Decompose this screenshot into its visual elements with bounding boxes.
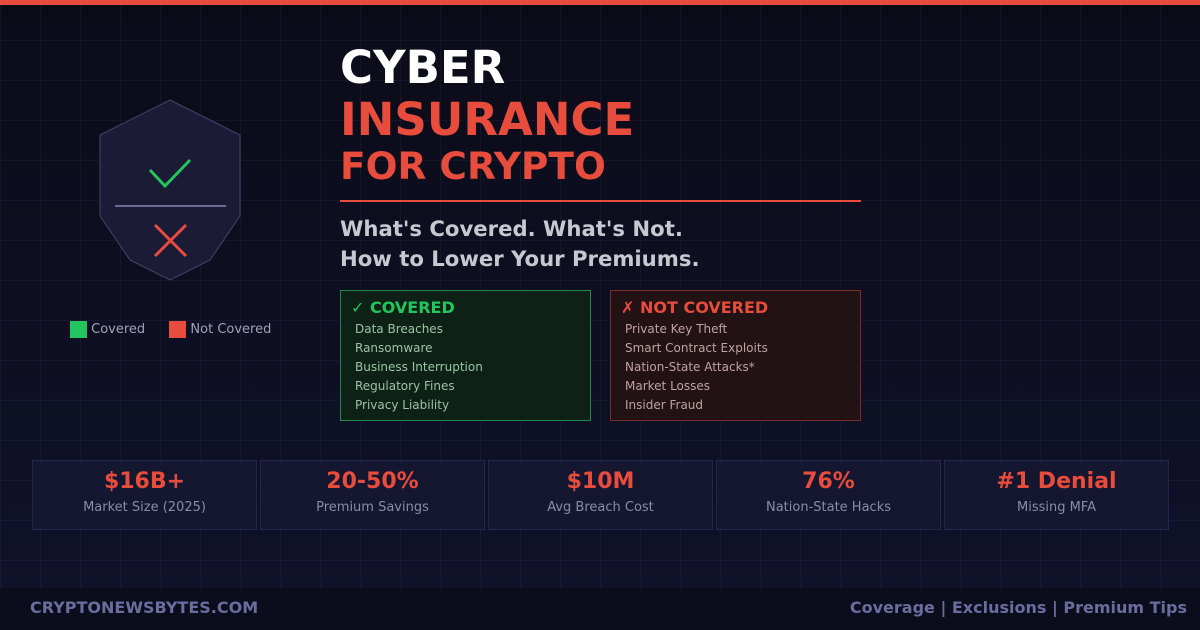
- panel: not covered: Market Losses: [625, 379, 710, 393]
- stat: market size: Market Size (2025): [83, 500, 206, 515]
- panel: covered: Data Breaches: [355, 322, 443, 336]
- stat: premium savings: [260, 460, 485, 530]
- title: CYBER: [340, 41, 505, 94]
- stat: denial: [944, 460, 1169, 530]
- icon: shield: [100, 100, 240, 280]
- subtitle: What's Covered. What's Not.: [340, 216, 683, 241]
- stat: breach cost: [488, 460, 713, 530]
- panel: not covered: Private Key Theft: [625, 322, 727, 336]
- footer: CRYPTONEWSBYTES.COM: [30, 598, 258, 617]
- panel: covered: Privacy Liability: [355, 398, 449, 412]
- title: [340, 41, 634, 188]
- stat: nation-state: [716, 460, 941, 530]
- panel: not covered: [610, 290, 861, 421]
- stat: nation-state: 76%: [802, 469, 855, 494]
- panel: covered: [340, 290, 591, 421]
- stat: market size: [32, 460, 257, 530]
- stat: nation-state: Nation-State Hacks: [766, 500, 891, 515]
- subtitle: How to Lower Your Premiums.: [340, 246, 700, 271]
- panel: covered: Business Interruption: [355, 360, 483, 374]
- stat: breach cost: $10M: [567, 469, 634, 494]
- legend: Covered Not Covered: [91, 322, 271, 337]
- footer: [0, 588, 1200, 630]
- footer: Coverage | Exclusions | Premium Tips: [850, 598, 1187, 617]
- stat: denial: #1 Denial: [996, 469, 1117, 494]
- panel: covered: Ransomware: [355, 341, 433, 355]
- panel: not covered: Nation-State Attacks*: [625, 360, 755, 374]
- panel: not covered: Insider Fraud: [625, 398, 703, 412]
- panel: covered: ✓ COVERED: [351, 298, 455, 317]
- stat: denial: Missing MFA: [1017, 500, 1096, 515]
- panel: not covered: ✗ NOT COVERED: [621, 298, 768, 317]
- stat: premium savings: 20-50%: [326, 469, 419, 494]
- panel: covered: Regulatory Fines: [355, 379, 455, 393]
- stat: market size: $16B+: [104, 469, 185, 494]
- title: INSURANCE: [340, 93, 634, 146]
- subtitle: [340, 216, 700, 271]
- stat: premium savings: Premium Savings: [316, 500, 429, 515]
- title: FOR CRYPTO: [340, 144, 606, 188]
- stat: breach cost: Avg Breach Cost: [547, 500, 654, 515]
- panel: not covered: Smart Contract Exploits: [625, 341, 768, 355]
